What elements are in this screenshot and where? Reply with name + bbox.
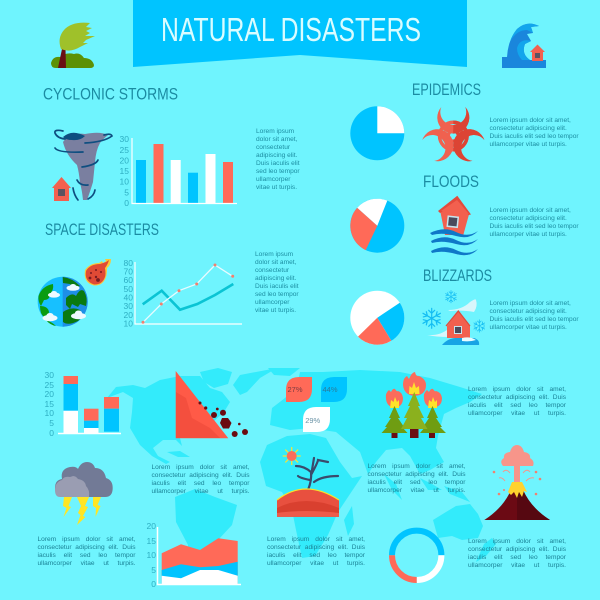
heading: blizzards: BLIZZARDS [423,267,492,285]
pie chart: blizzards [350,291,404,345]
percent badge: 44%: 44% [322,385,338,394]
area chart: 0 [151,579,156,589]
text: cyclonic storms [256,128,300,191]
icon: storm cloud [55,462,113,525]
stacked bar chart: 0 [49,428,54,438]
icon: biohazard [422,107,484,162]
text: forest fire: ullamcorper vitae ut turpis. [468,410,566,417]
icon: landslide [176,371,248,438]
text: floods: Duis iaculis elit sed leo tempor [490,223,579,230]
heading: epidemics: EPIDEMICS [412,81,481,99]
icon: volcano [484,445,550,520]
world map [107,368,496,580]
text: landslide: iaculis elit sed leo tempor [152,480,250,487]
text: space disasters: sed leo tempor [255,290,299,298]
icon: blizzard house [423,290,485,345]
text: space disasters [255,250,299,314]
text: space disasters: Lorem ipsum [255,250,293,258]
text: landslide: Lorem ipsum dolor sit amet, [152,464,250,471]
text: cyclonic storms: sed leo tempor [256,168,300,175]
text: space disasters: Duis iaculis elit [255,282,299,290]
text: cyclonic storms: dolor sit amet, [256,136,297,143]
icon: drought [277,447,339,517]
text: centre map: Lorem ipsum dolor sit amet, [368,463,466,470]
text: drought: Lorem ipsum dolor sit amet, [267,536,365,543]
text: epidemics: Duis iaculis elit sed leo tempor [490,132,579,140]
text: centre map [368,463,466,494]
line chart: space disasters: 80 [124,258,133,268]
heading: space disasters: SPACE DISASTERS [45,221,159,239]
text: drought: consectetur adipiscing elit. Duis [267,544,365,551]
text: epidemics [490,116,579,148]
title banner: NATURAL DISASTERS [161,11,421,48]
text: volcano: ullamcorper vitae ut turpis. [468,562,566,568]
area chart: 15 [147,536,156,546]
percent badge: 27%: 27% [287,385,303,394]
text: epidemics: ullamcorper vitae ut turpis. [490,140,567,148]
text: epidemics: consectetur adipiscing elit. [490,124,567,132]
line chart: space disasters: 20 [124,310,133,320]
text: forest fire [468,386,566,417]
icon: tornado [52,130,112,201]
stacked bar chart: 15 [45,399,54,409]
line chart: space disasters: 60 [124,275,133,285]
area chart [147,521,241,589]
heading: floods: FLOODS [423,173,479,191]
stacked bar chart: 10 [45,408,54,418]
line chart: space disasters [124,258,242,328]
text: forest fire: iaculis elit sed leo tempor [468,402,566,409]
line chart: space disasters: 40 [124,292,133,302]
text: storm: consectetur adipiscing elit. Duis [38,544,136,551]
text: blizzards: Duis iaculis elit sed leo tempor [490,316,579,322]
pie chart: floods [350,199,404,253]
bar chart: cyclonic storms: 0 [124,198,129,208]
text: volcano: Lorem ipsum dolor sit amet, [468,538,566,544]
text: volcano [468,538,566,568]
text: landslide: consectetur adipiscing elit. Duis [152,472,250,479]
text: drought [267,536,365,567]
text: storm: Lorem ipsum dolor sit amet, [38,536,136,543]
line chart: space disasters: 30 [124,301,133,311]
text: cyclonic storms: ullamcorper [256,176,290,183]
text: drought: ullamcorper vitae ut turpis. [267,560,365,567]
line chart: space disasters: 50 [124,284,133,294]
text: forest fire: Lorem ipsum dolor sit amet, [468,386,566,393]
icon: wind-blown tree [51,23,95,68]
line chart: space disasters: 10 [124,318,133,328]
stacked bar chart [45,370,121,438]
text: cyclonic storms: Duis iaculis elit [256,160,300,167]
pie chart: epidemics [350,106,404,160]
icon: earth with meteor [38,259,111,327]
stacked bar chart: 30 [45,370,54,380]
text: cyclonic storms: vitae ut turpis. [256,184,297,191]
text: centre map: ullamcorper vitae ut turpis. [368,487,466,494]
text: floods: Lorem ipsum dolor sit amet, [490,207,571,214]
stacked bar chart: 5 [49,418,54,428]
text: blizzards: consectetur adipiscing elit. [490,308,567,314]
bar chart: cyclonic storms: 10 [120,176,129,186]
text: volcano: iaculis elit sed leo tempor [468,554,566,560]
area chart: 10 [147,550,156,560]
text: landslide: ullamcorper vitae ut turpis. [152,488,250,495]
text: floods [490,207,579,238]
text: drought: iaculis elit sed leo tempor [267,552,365,559]
text: space disasters: adipiscing elit. [255,274,296,282]
text: blizzards: Lorem ipsum dolor sit amet, [490,300,571,306]
text: cyclonic storms: adipiscing elit. [256,152,297,159]
icon: forest fire [382,372,446,438]
text: space disasters: dolor sit amet, [255,258,296,266]
text: floods: consectetur adipiscing elit. [490,215,567,222]
text: blizzards [490,300,579,330]
title banner [133,0,467,67]
bar chart: cyclonic storms: 15 [120,166,129,176]
text: space disasters: consectetur [255,266,289,274]
text: space disasters: vitae ut turpis. [255,306,296,314]
percent badge: 44% [321,377,347,402]
bar chart: cyclonic storms: 30 [120,134,129,144]
percent badge: 29% [303,407,330,432]
line chart: space disasters: 70 [124,266,133,276]
text: storm: ullamcorper vitae ut turpis. [38,560,136,567]
bar chart: cyclonic storms: 25 [120,145,129,155]
percent badge: 27% [286,377,312,402]
area chart: 20 [147,521,156,531]
bar chart: cyclonic storms: 20 [120,156,129,166]
bar chart: cyclonic storms [120,134,237,208]
bar chart: cyclonic storms: 5 [124,188,129,198]
text: landslide [152,464,250,495]
area chart: 5 [151,565,156,575]
text: epidemics: Lorem ipsum dolor sit amet, [490,116,571,124]
icon: tsunami [502,24,546,68]
text: volcano: consectetur adipiscing elit. Duis [468,546,566,552]
text: centre map: consectetur adipiscing elit. Duis [368,471,466,478]
stacked bar chart: 25 [45,380,54,390]
stacked bar chart: 20 [45,389,54,399]
text: blizzards: ullamcorper vitae ut turpis. [490,324,567,330]
text: storm: iaculis elit sed leo tempor [38,552,136,559]
text: floods: ullamcorper vitae ut turpis. [490,231,567,238]
percent badge: 29%: 29% [305,416,321,425]
text: centre map: iaculis elit sed leo tempor [368,479,466,486]
text: cyclonic storms: consectetur [256,144,290,151]
text: storm [38,536,136,567]
text: space disasters: ullamcorper [255,298,289,306]
text: forest fire: consectetur adipiscing elit. Duis [468,394,566,401]
heading: cyclonic storms: CYCLONIC STORMS [43,86,178,104]
donut chart [392,531,441,580]
text: cyclonic storms: Lorem ipsum [256,128,294,135]
icon: flooded house [430,196,478,255]
